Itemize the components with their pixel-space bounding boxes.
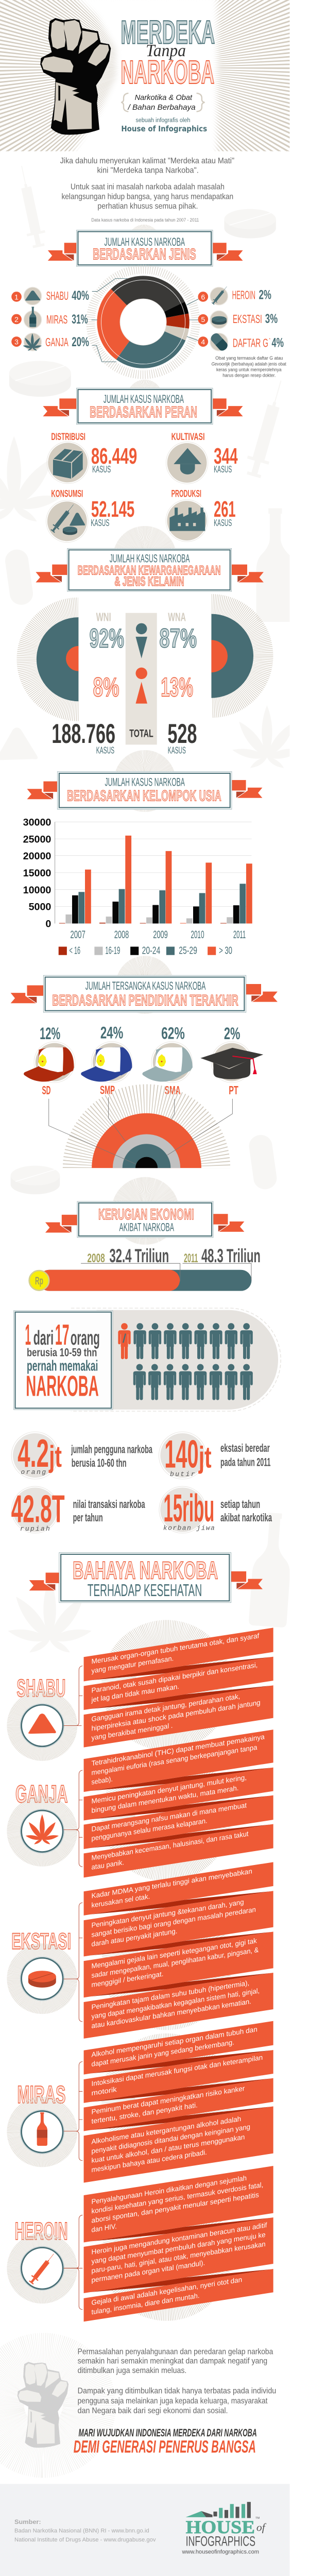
bar chart: kelompok usia: 2008: [114, 928, 129, 941]
panel: efek shabu 3: hiperpireksia atau shock pada pembuluh darah jantung: [92, 1699, 261, 1733]
panel: efek miras 1: [84, 2021, 273, 2079]
stat: 42.8T: rupiah: [20, 1525, 50, 1533]
panel: efek ekstasi 2: [84, 1891, 273, 1961]
semicircle chart: pendidikan: [48, 1084, 233, 1168]
hat: SMP: 24%: [100, 1023, 123, 1042]
intro text: [60, 157, 234, 223]
panel: efek ganja 3: penggunanya selalu merasa kelaparan.: [92, 1817, 208, 1842]
banner: kerugian ekonomi: [45, 1191, 244, 1238]
panel: 1 dari 17 orang: orang: [71, 1327, 100, 1349]
panel: efek heroin 2: paru-paru, hati, ginjal, atau otak, menyebabkan kerusakan: [92, 2240, 266, 2275]
panel: efek miras 3: Peminum berat dapat meningkatkan risiko kanker: [92, 2084, 245, 2116]
banner: jenis: BERDASARKAN JENIS: [93, 245, 196, 263]
bars 2010: [180, 862, 212, 923]
hat: SD: SD: [42, 1083, 50, 1097]
panel: efek miras 4: meskipun bahaya atau cedera pribadi.: [92, 2148, 207, 2174]
stat: 140jt: butir: [170, 1470, 195, 1478]
panel: efek ganja 4: Menyebabkan kecemasan, halusinasi, dan rasa takut: [92, 1830, 249, 1862]
panel: efek ekstasi 4: yang dapat mengakibatkan kegagalan sistem hati, ginjal,: [92, 1987, 260, 2021]
gender column: [126, 613, 157, 744]
stat: konsumsi: KASUS: [91, 517, 109, 528]
stat: 4.2jt: jt: [48, 1440, 62, 1473]
panel: 1 dari 17 orang: dari: [33, 1327, 54, 1349]
panel: efek heroin 2: yang dapat menyumbat pembuluh darah yang menuju ke: [92, 2231, 266, 2265]
banner: peran: JUMLAH KASUS NARKOBA: [104, 393, 184, 405]
bar chart: kelompok usia: 25000: [23, 834, 51, 845]
footnote: daftar G: harus dengan resep dokter.: [222, 373, 276, 378]
section rays: [118, 1637, 215, 2304]
section: ekstasi: [11, 1903, 82, 2022]
hat: SMP: [81, 1023, 132, 1096]
stat: 42.8T: per tahun: [73, 1511, 103, 1524]
bar chart: kelompok usia: 10000: [23, 885, 51, 896]
stat: 15ribu: korban jiwa: [163, 1524, 215, 1532]
stat: 4.2jt: orang: [21, 1468, 46, 1476]
stats: WNI: KASUS: [96, 745, 114, 756]
kerugian labels: 2008: [87, 1251, 105, 1265]
stat: konsumsi: [46, 488, 134, 543]
kerugian labels: [87, 1245, 261, 1266]
chart legend: 25-29: [179, 945, 197, 957]
legend: shabu: 40%: [72, 289, 89, 303]
banner: bahaya narkoba: [29, 1553, 263, 1603]
stat: kultivasi: KULTIVASI: [171, 432, 205, 443]
stat: produksi: [166, 488, 236, 541]
banner: kelompok usia: JUMLAH KASUS NARKOBA: [105, 776, 185, 789]
stat: distribusi: 86.449: [91, 444, 137, 469]
stat: distribusi: DISTRIBUSI: [51, 432, 85, 443]
panel: efek miras 1: Alkohol mempengaruhi setiap organ dalam tubuh dan: [92, 2025, 258, 2059]
footnote: daftar G: keras yang untuk memperolehnya: [216, 367, 282, 372]
logo: House of Infographics: TM: [255, 2517, 260, 2520]
legend: ekstasi: EKSTASI: [233, 312, 262, 326]
subtitle with braces: Narkotika & Obat: [135, 93, 193, 102]
stat: kultivasi: KASUS: [214, 464, 232, 474]
stat: 4.2jt: [11, 1432, 152, 1479]
legend: ganja: 3: [14, 337, 19, 346]
stat: produksi: PRODUKSI: [171, 488, 201, 499]
footnote: daftar G: [212, 355, 286, 378]
panel: efek miras 4: penyakit didiagnosis ditandai dengan keinginan yang: [92, 2123, 250, 2155]
panel: 1 dari 17 orang: [14, 1308, 281, 1411]
section: shabu: [14, 1666, 82, 1754]
closing text: dan Negara baik dari segi ekonomi dan sosial.: [78, 2406, 228, 2415]
panel: efek shabu 1: Merusak organ-organ tubuh terutama otak, dan syaraf: [92, 1632, 260, 1666]
logo: House of Infographics: HOUSE: [186, 2517, 255, 2537]
logo: House of Infographics: INFOGRAPHICS: [186, 2533, 255, 2549]
legend: shabu: 1: [14, 293, 19, 301]
panel: efek shabu 3: [84, 1685, 273, 1748]
stat: konsumsi: KONSUMSI: [51, 488, 83, 499]
sources: National Institute of Drugs Abuse - www.drugabuse.gov: [14, 2537, 156, 2543]
stat: 4.2jt: jumlah pengguna narkoba: [71, 1443, 152, 1455]
stats: WNI: 92%: [89, 623, 124, 653]
panel: efek heroin 2: [84, 2217, 273, 2298]
panel: efek shabu 2: jet lag dan tidak mau makan.: [91, 1683, 179, 1704]
stat: distribusi: [47, 432, 137, 484]
kerugian labels: 2011: [184, 1251, 198, 1265]
bars 2007: [59, 870, 91, 923]
panel: efek ganja 2: Memicu peningkatan denyut jantung, mulut kering,: [92, 1773, 247, 1805]
panel: efek ganja 4: [84, 1824, 273, 1877]
banner: jenis: [48, 230, 243, 266]
closing text: ditimbulkan juga semakin meluas.: [78, 2366, 186, 2375]
section: shabu: SHABU: [16, 1675, 65, 1702]
panel: efek ekstasi 1: kerusakan sel otak.: [92, 1892, 150, 1909]
panel: efek ekstasi 4: atau kardiovaskular bahkan menyebabkan kematian.: [92, 1997, 251, 2030]
bar chart: kelompok usia: 2011: [233, 928, 246, 941]
panel: efek ganja 3: [84, 1795, 273, 1853]
panel: efek shabu 1: yang mengatur pernafasan.: [92, 1654, 174, 1675]
icon: raised fist: [40, 18, 111, 135]
panel: efek ekstasi 1: [84, 1862, 273, 1920]
section: miras: MIRAS: [17, 2081, 65, 2109]
stats: WNA: KASUS: [168, 745, 186, 756]
closing text: [78, 2347, 276, 2415]
banner: peran: BERDASARKAN PERAN: [90, 403, 197, 421]
bar chart: kelompok usia: [23, 817, 252, 941]
closing text: semakin hari semakin meningkat dan dampak negatif yang: [78, 2357, 267, 2365]
subtitle with braces: / Bahan Berbahaya: [127, 103, 196, 112]
panel: efek ganja 1: mengalami euforia (rasa senang berkepanjangan tanpa: [92, 1743, 258, 1777]
pictogram: 17 people: [118, 1323, 253, 1400]
panel: efek ekstasi 3: Mengalami gejala lain seperti ketegangan otot, gigi tak: [92, 1937, 257, 1970]
footnote: daftar G: Obat yang termasuk daftar G atau: [215, 355, 283, 361]
stats: WNA: [159, 610, 197, 755]
banner: kewarganegaraan: JUMLAH KASUS NARKOBA: [110, 552, 190, 565]
panel: efek heroin 3: Gejala di awal adalah kegelisahan, nyeri otot dan: [92, 2276, 242, 2307]
panel: efek miras 4: kuat untuk alkohol, dan / atau terus menggunakan: [92, 2133, 245, 2164]
panel: efek ganja 1: Tetrahidrokanabinol (THC) dapat membuat pemakainya: [92, 1733, 265, 1767]
section: ganja: [14, 1770, 82, 1867]
section: ekstasi: EKSTASI: [11, 1929, 71, 1954]
bars 2011: [220, 863, 252, 923]
half chart: WNI: [16, 598, 78, 721]
title: Merdeka Tanpa Narkoba: [121, 13, 215, 91]
chart legend: < 16: [70, 945, 80, 957]
intro text: Jika dahulu menyerukan kalimat "Merdeka atau Mati": [60, 157, 234, 165]
panel: efek ganja 2: [84, 1768, 273, 1825]
stat: 140jt: 140: [164, 1432, 199, 1476]
legend: ganja: GANJA: [45, 335, 68, 349]
bar chart: kelompok usia: 5000: [29, 902, 51, 913]
section: heroin: [14, 2215, 82, 2310]
stat: 4.2jt: berusia 10-60 thn: [72, 1456, 127, 1469]
stat: produksi: 261: [214, 497, 236, 522]
stats: WNI: 188.766: [52, 719, 115, 749]
panel: efek shabu 1: [84, 1628, 273, 1686]
bar chart: kelompok usia: 20000: [23, 851, 51, 862]
panel: efek ekstasi 3: sadar mengepalkan, mual, penglihatan kabur, pingsan, &: [92, 1946, 259, 1979]
legend: shabu: SHABU: [46, 289, 68, 302]
panel: 1 dari 17 orang: berusia 10-59 thn: [27, 1346, 97, 1359]
hat: SMP: SMP: [100, 1083, 115, 1096]
panel: efek ganja 2: bingung dalam menentukan waktu, mata merah.: [92, 1784, 238, 1815]
banner: bahaya narkoba: TERHADAP KESEHATAN: [88, 1581, 202, 1600]
panel: efek ekstasi 3: menggigil / berkeringat.: [92, 1970, 164, 1989]
panel: efek shabu 3: Gangguan irama detak jantung, perdarahan otak,: [92, 1692, 240, 1723]
legend: miras: 31%: [72, 312, 88, 327]
banner: kerugian ekonomi: AKIBAT NARKOBA: [119, 1221, 174, 1234]
panel: efek heroin 2: Heroin juga mengandung kontaminan beracun atau aditif: [92, 2221, 267, 2256]
half chart: WNA: [211, 594, 273, 718]
legend: heroin: 6: [201, 293, 205, 301]
panel: efek heroin 1: dan HIV.: [92, 2222, 117, 2234]
hat: SD: [24, 1024, 75, 1097]
panel: efek shabu 2: [84, 1657, 273, 1715]
chart legend: [59, 945, 232, 957]
stats: WNA: 13%: [161, 672, 193, 702]
kerugian labels: 32.4 Triliun: [109, 1245, 169, 1266]
panel: efek miras 3: [84, 2078, 273, 2136]
bar chart: kelompok usia: 15000: [23, 868, 51, 879]
banner: kewarganegaraan: & JENIS KELAMIN: [114, 575, 184, 589]
panel: efek ganja 1: [84, 1730, 273, 1797]
intro text: Untuk saat ini masalah narkoba adalah masalah: [71, 183, 225, 192]
hat: SMA: 62%: [161, 1024, 185, 1043]
intro text: perhatian khusus semua pihak.: [97, 202, 198, 211]
panel: 1 dari 17 orang: NARKOBA: [26, 1369, 99, 1402]
panel: efek heroin 2: permanen pada organ vital (mandul).: [92, 2259, 205, 2284]
hat: SD: 12%: [40, 1024, 60, 1043]
chart legend: > 30: [219, 945, 232, 957]
credit: [121, 117, 207, 133]
panel: efek shabu 2: Paranoid, otak susah dipakai berpikir dan konsentrasi,: [92, 1661, 258, 1694]
panel: efek ekstasi 4: [84, 1973, 273, 2039]
kerugian bar: [29, 1263, 251, 1291]
section: miras: [14, 2062, 82, 2161]
bar chart: kelompok usia: 2009: [153, 928, 168, 941]
sources: Badan Narkotika Nasional (BNN) RI - www.bnn.go.id: [14, 2528, 149, 2534]
panel: efek miras 2: motorik: [92, 2086, 117, 2097]
legend: daftar g: *: [269, 337, 270, 342]
legend: miras: MIRAS: [46, 313, 67, 326]
panel: efek ganja 4: atau panik.: [92, 1858, 124, 1871]
banner: pendidikan terakhir: [11, 967, 278, 1012]
stat: 42.8T: nilai transaksi narkoba: [73, 1498, 145, 1511]
banner: kelompok usia: [27, 762, 262, 809]
title: Merdeka Tanpa Narkoba: Tanpa: [146, 41, 186, 60]
stat: 42.8T: [11, 1486, 145, 1533]
stat: 4.2jt: 4.2: [18, 1432, 49, 1476]
sources: [14, 2518, 156, 2543]
stats: WNA: 528: [167, 719, 197, 749]
panel: efek ganja 3: Dapat merangsang nafsu makan di mana membuat: [92, 1801, 247, 1833]
legend: shabu: [11, 287, 89, 305]
chart legend: 16-19: [105, 945, 120, 957]
bar chart: kelompok usia: 0: [45, 919, 51, 930]
stat: distribusi: KASUS: [92, 464, 111, 474]
bar chart: kelompok usia: 30000: [23, 817, 51, 828]
hat: SMA: SMA: [165, 1083, 181, 1097]
panel: efek ekstasi 2: darah atau penyakit jantung.: [92, 1927, 177, 1948]
panel: efek ekstasi 1: Kadar MDMA yang terlalu tinggi akan menyebabkan: [92, 1867, 252, 1900]
sources: Sumber:: [14, 2518, 41, 2526]
stats: WNI: 8%: [93, 672, 119, 702]
panel: efek heroin 3: [84, 2269, 273, 2321]
legend: miras: 2: [14, 315, 19, 324]
panel: efek ekstasi 2: Peningkatan denyut jantung &tekanan darah, yang: [92, 1898, 244, 1929]
panel: efek heroin 1: [84, 2166, 273, 2247]
credit: sebuah infografis oleh: [135, 117, 190, 124]
logo: House of Infographics: of: [256, 2522, 267, 2534]
hat: SMA: [142, 1024, 193, 1097]
stat: 15ribu: setiap tahun: [220, 1498, 260, 1511]
legend: heroin: [198, 285, 271, 306]
panel: efek heroin 1: kondisi kesehatan yang serius, termasuk overdosis fatal,: [92, 2181, 263, 2215]
panel: efek miras 3: tertentu, stroke, dan penyakit hati.: [92, 2101, 198, 2125]
legend: ekstasi: [198, 311, 278, 329]
stat: 15ribu: 15ribu: [164, 1486, 214, 1530]
section: ganja: GANJA: [15, 1781, 68, 1808]
bars 2009: [140, 851, 171, 923]
panel: efek ganja 1: sebab).: [92, 1775, 113, 1786]
panel: efek ekstasi 4: Peningkatan tajam dalam suhu tubuh (hipertermia),: [92, 1979, 249, 2011]
cap: PT: PT: [229, 1083, 238, 1097]
call to action: [74, 2426, 257, 2456]
footer background: [0, 2484, 289, 2576]
donut chart: [91, 269, 196, 375]
legend: miras: [11, 307, 88, 329]
legend: daftar g: [198, 332, 284, 352]
logo: House of Infographics: [181, 2502, 267, 2555]
credit: House of Infographics: [121, 124, 207, 133]
panel: efek heroin 1: Penyalahgunaan Heroin dikaitkan dengan sejumlah: [92, 2174, 247, 2206]
panel: efek miras 2: Intoksikasi dapat merusak fungsi otak dan keterampilan: [92, 2054, 263, 2088]
stat: produksi: KASUS: [214, 517, 232, 528]
legend: daftar g: 4: [201, 337, 205, 346]
stat: 140jt: jt: [198, 1440, 212, 1474]
stat: kultivasi: [166, 432, 238, 484]
stat: kultivasi: 344: [214, 444, 238, 469]
bar chart: kelompok usia: 2010: [191, 928, 204, 941]
stat: konsumsi: 52.145: [91, 497, 134, 522]
banner: kerugian ekonomi: KERUGIAN EKONOMI: [98, 1206, 194, 1223]
banner: jenis: JUMLAH KASUS NARKOBA: [105, 235, 185, 248]
legend: ganja: [11, 333, 89, 351]
connectors: [92, 279, 198, 362]
legend: heroin: HEROIN: [232, 289, 255, 302]
panel: 1 dari 17 orang: 17: [55, 1318, 70, 1351]
cap: PT: 2%: [224, 1024, 240, 1043]
background watermarks: [0, 164, 302, 1655]
panel: efek miras 2: [84, 2050, 273, 2108]
stats: WNI: [52, 610, 124, 755]
closing fist: [0, 2360, 89, 2451]
section: heroin: HEROIN: [15, 2218, 68, 2245]
panel: efek miras 4: Alkoholisme atau ketergantungan alkohol adalah: [92, 2115, 241, 2146]
stat: 42.8T: 42.8T: [11, 1487, 65, 1531]
panel: efek ekstasi 2: sangat berisiko bagi orang dengan masalah peredaran: [92, 1906, 256, 1939]
legend: ekstasi: 3%: [265, 312, 278, 326]
panel: efek heroin 3: tulang, insomnia, diare dan muntah.: [92, 2292, 200, 2316]
bars 2008: [99, 836, 131, 923]
logo: House of Infographics: www.houseofinfographics.com: [181, 2549, 259, 2555]
stat: 140jt: [159, 1432, 270, 1479]
banner: peran: [43, 387, 243, 425]
header sunburst: [0, 0, 289, 151]
title: Merdeka Tanpa Narkoba: MERDEKA: [121, 13, 215, 50]
panel: efek ekstasi 3: [84, 1931, 273, 2002]
panel: efek miras 4: [84, 2106, 273, 2183]
panel: 1 dari 17 orang: pernah memakai: [27, 1358, 98, 1375]
cap: PT: [200, 1024, 263, 1097]
chart legend: 20-24: [142, 945, 160, 957]
title: Merdeka Tanpa Narkoba: NARKOBA: [121, 54, 214, 91]
panel: 1 dari 17 orang: 1: [25, 1318, 31, 1351]
stats: WNA: WNA: [168, 610, 186, 623]
intro text: kelangsungan hidup bangsa, yang harus mendapatkan: [61, 192, 233, 201]
legend: ganja: 20%: [72, 335, 89, 349]
stats: WNI: WNI: [96, 610, 111, 623]
intro text: kini "Merdeka tanpa Narkoba".: [97, 166, 199, 175]
stats: WNA: 87%: [159, 623, 197, 653]
kerugian bar: Rp: [35, 1274, 43, 1287]
panel: efek miras 1: dapat merusak janin yang sedang berkembang.: [92, 2038, 234, 2068]
gender column: TOTAL: [129, 726, 153, 739]
subtitle with braces: [121, 93, 205, 112]
banner: kewarganegaraan: [36, 538, 264, 591]
panel: efek heroin 1: aborsi spontan, dan penyakit menular seperti hepatitis: [92, 2191, 259, 2225]
legend: heroin: 2%: [259, 288, 271, 302]
legend: ekstasi: 5: [201, 315, 205, 324]
intro text: Data kasus narkoba di Indonesia pada tahun 2007 - 2011: [91, 217, 199, 223]
bar chart: kelompok usia: 2007: [70, 928, 85, 941]
panel: efek shabu 3: yang berakibat meninggal .: [92, 1721, 173, 1742]
